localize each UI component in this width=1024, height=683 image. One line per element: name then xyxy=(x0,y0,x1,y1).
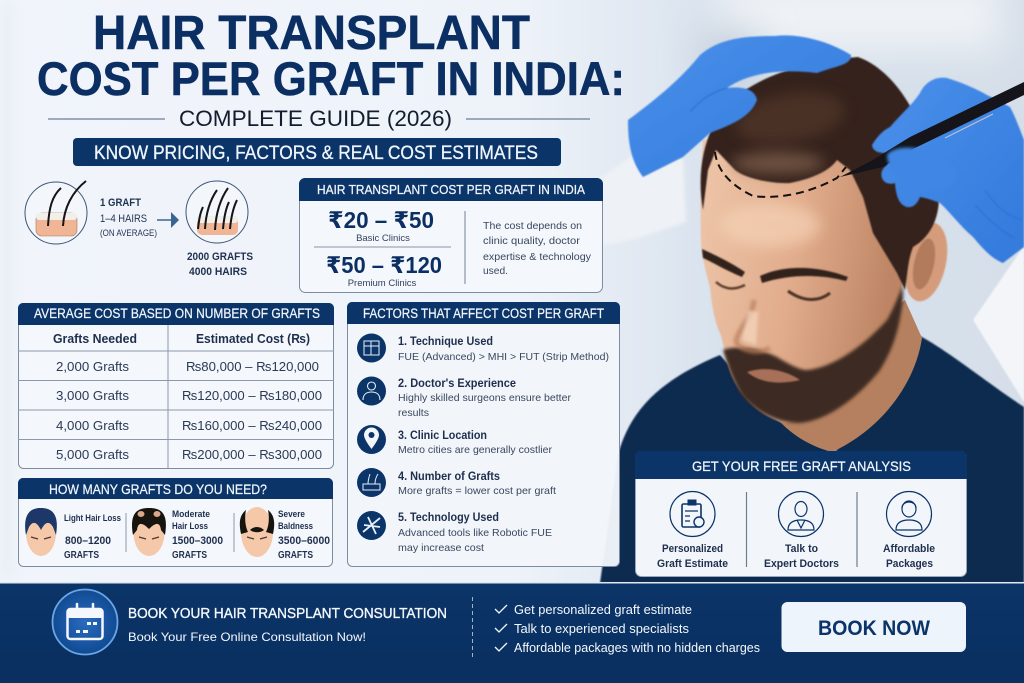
basic clinics price: ₹20 – ₹50 xyxy=(328,207,434,233)
analysis labels: Graft Estimate xyxy=(657,558,728,570)
table rows: 5,000 Grafts xyxy=(56,447,130,462)
panel: how many grafts xyxy=(18,478,333,566)
factor 3 xyxy=(357,425,552,456)
table rows: ₨160,000 – ₨240,000 xyxy=(182,418,322,433)
factor 2 xyxy=(357,376,571,419)
cost note: expertise & technology xyxy=(483,251,592,263)
banner: KNOW PRICING, FACTORS & REAL COST ESTIMATES xyxy=(94,143,538,164)
benefits checklist: Get personalized graft estimate xyxy=(514,603,692,617)
table rows: ₨200,000 – ₨300,000 xyxy=(182,447,322,462)
subtitle: COMPLETE GUIDE (2026) xyxy=(179,106,452,131)
severe baldness text xyxy=(278,509,330,561)
panel: factors that affect cost xyxy=(347,302,620,566)
button: book now: BOOK NOW xyxy=(818,617,930,640)
footer call to action xyxy=(0,582,1024,683)
hair xyxy=(701,57,939,290)
face xyxy=(701,140,903,423)
doctor coat left sleeve xyxy=(598,150,686,246)
beard xyxy=(723,285,903,423)
icon: doctor xyxy=(778,492,824,536)
analysis labels: Affordable xyxy=(883,543,935,555)
table rows: 2,000 Grafts xyxy=(56,359,130,374)
photo: doctor marking the hairline on a patient xyxy=(598,35,1024,583)
graft text: 1–4 HAIRS xyxy=(100,213,147,225)
moderate hair loss text: GRAFTS xyxy=(172,550,207,561)
premium clinics price: Premium Clinics xyxy=(348,278,417,289)
table rows xyxy=(56,359,322,462)
cost note: The cost depends on xyxy=(483,220,582,232)
left glove xyxy=(628,35,851,177)
panel: factors that affect cost: FACTORS THAT AFFECT COST PER GRAFT xyxy=(363,306,604,321)
title xyxy=(37,7,625,105)
icon: severe baldness head xyxy=(240,507,274,557)
factor 5: may increase cost xyxy=(398,542,484,554)
ear xyxy=(898,219,954,305)
right glove xyxy=(872,78,1024,263)
factor 1: 1. Technique Used xyxy=(398,336,493,348)
total graft text: 4000 HAIRS xyxy=(189,266,247,278)
basic clinics price xyxy=(328,207,434,244)
factor 2: Highly skilled surgeons ensure better xyxy=(398,392,571,404)
icon: moderate hair loss head xyxy=(132,508,166,556)
graft text: (ON AVERAGE) xyxy=(100,228,157,238)
panel: free graft analysis xyxy=(635,451,967,576)
icon: light hair loss head xyxy=(25,508,57,556)
panel: average cost table xyxy=(18,303,334,468)
factor 5 xyxy=(357,511,552,554)
moderate hair loss text xyxy=(172,509,223,561)
factor 5: 5. Technology Used xyxy=(398,512,499,524)
cost note: clinic quality, doctor xyxy=(483,235,581,247)
total graft text: 2000 GRAFTS xyxy=(187,251,253,263)
analysis labels xyxy=(657,543,935,570)
table rows: 3,000 Grafts xyxy=(56,388,130,403)
dashed hairline xyxy=(715,152,846,197)
neck xyxy=(770,300,922,452)
analysis labels: Talk to xyxy=(785,543,818,555)
lower lip xyxy=(747,369,800,383)
graft explainer xyxy=(25,181,253,278)
panel: how many grafts: HOW MANY GRAFTS DO YOU NEED? xyxy=(49,481,267,497)
premium clinics price: ₹50 – ₹120 xyxy=(326,252,442,278)
panel: cost per graft xyxy=(299,178,603,292)
eyebrows, eyes and nose xyxy=(702,249,848,351)
moderate hair loss text: Hair Loss xyxy=(172,521,208,532)
factor 2: results xyxy=(398,407,429,419)
cost note: used. xyxy=(483,265,508,277)
severe baldness text: 3500–6000 xyxy=(278,535,330,547)
panel: free graft analysis: GET YOUR FREE GRAFT ANALYSIS xyxy=(692,458,911,474)
light hair loss text: Light Hair Loss xyxy=(64,513,121,524)
analysis labels: Expert Doctors xyxy=(764,558,839,570)
arrow xyxy=(157,212,179,228)
button: book now xyxy=(782,602,966,652)
factor 3: 3. Clinic Location xyxy=(398,430,487,442)
table header xyxy=(53,332,310,346)
icon: single graft xyxy=(25,181,87,244)
title: COST PER GRAFT IN INDIA: xyxy=(37,52,625,105)
graft text: 1 GRAFT xyxy=(100,197,141,209)
consultation text: BOOK YOUR HAIR TRANSPLANT CONSULTATION xyxy=(128,606,447,622)
table header: Estimated Cost (₨) xyxy=(196,332,310,346)
severe baldness text: GRAFTS xyxy=(278,550,313,561)
light hair loss text: GRAFTS xyxy=(64,550,99,561)
patient shirt xyxy=(600,336,1024,583)
marker pen xyxy=(840,82,1024,177)
doctor coat right sleeve xyxy=(973,246,1024,402)
moderate hair loss text: 1500–3000 xyxy=(172,535,223,547)
factor 4 xyxy=(357,468,556,497)
factor 5: Advanced tools like Robotic FUE xyxy=(398,527,552,539)
factor 4: More grafts = lower cost per graft xyxy=(398,485,556,497)
premium clinics price xyxy=(326,252,442,289)
factor 1 xyxy=(357,334,609,363)
factor 2: 2. Doctor's Experience xyxy=(398,378,516,390)
consultation text: Book Your Free Online Consultation Now! xyxy=(128,630,366,644)
glove finger over pen xyxy=(887,148,958,192)
total graft text xyxy=(187,251,253,278)
factor 1: FUE (Advanced) > MHI > FUT (Strip Method) xyxy=(398,351,609,363)
analysis labels: Personalized xyxy=(662,543,723,555)
panel: average cost table: AVERAGE COST BASED ON NUMBER OF GRAFTS xyxy=(34,306,320,321)
table header: Grafts Needed xyxy=(53,332,137,346)
icon: many grafts xyxy=(186,181,248,243)
benefits checklist: Affordable packages with no hidden charges xyxy=(514,641,760,655)
consultation text xyxy=(128,606,447,644)
icon: support person xyxy=(886,492,932,536)
benefits checklist: Talk to experienced specialists xyxy=(514,622,689,636)
cost note xyxy=(483,220,592,277)
banner xyxy=(73,138,561,166)
light hair loss text xyxy=(64,513,121,561)
severe baldness text: Baldness xyxy=(278,521,313,532)
basic clinics price: Basic Clinics xyxy=(356,233,410,244)
light hair loss text: 800–1200 xyxy=(65,535,111,547)
graft text xyxy=(100,197,157,238)
table rows: ₨120,000 – ₨180,000 xyxy=(182,388,322,403)
panel: cost per graft: HAIR TRANSPLANT COST PER GRAFT IN INDIA xyxy=(317,183,586,197)
factor 3: Metro cities are generally costlier xyxy=(398,444,552,456)
benefits checklist xyxy=(495,603,760,655)
factor 4: 4. Number of Grafts xyxy=(398,471,500,483)
table rows: 4,000 Grafts xyxy=(56,418,130,433)
severe baldness text: Severe xyxy=(278,509,305,520)
icon: calendar xyxy=(52,590,118,654)
title: HAIR TRANSPLANT xyxy=(93,7,530,60)
icon: clipboard estimate xyxy=(670,492,715,536)
analysis labels: Packages xyxy=(886,558,933,570)
table rows: ₨80,000 – ₨120,000 xyxy=(186,359,319,374)
moderate hair loss text: Moderate xyxy=(172,509,210,520)
